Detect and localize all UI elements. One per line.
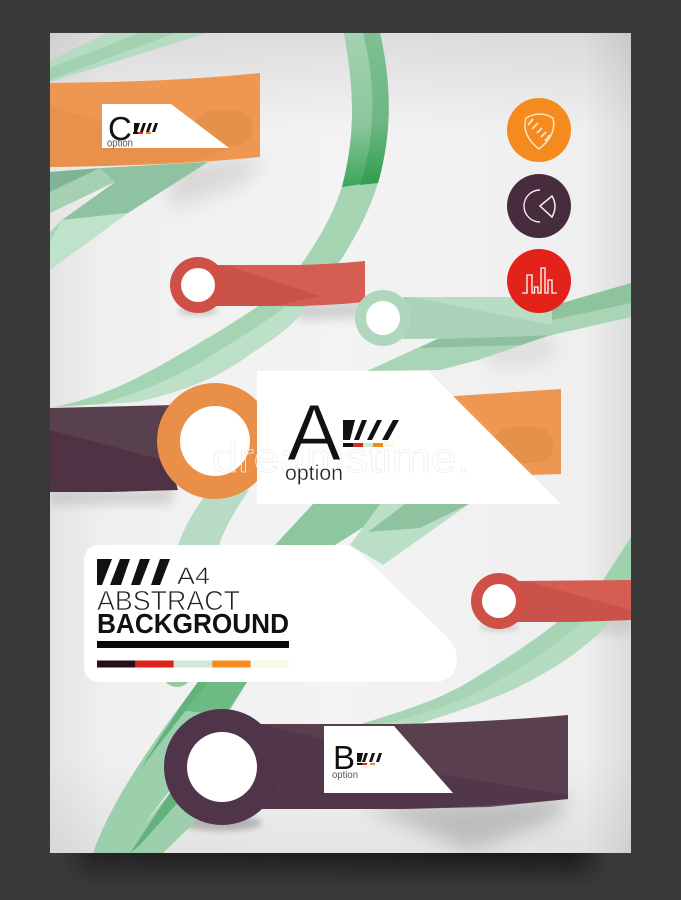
tab: option B [164, 709, 568, 825]
white label box [102, 104, 229, 148]
purple band [222, 715, 568, 809]
letter A: A [287, 388, 342, 477]
tab: red pin upper [170, 257, 365, 313]
ribbon: bottom strand [93, 682, 247, 853]
soft cast shadows [50, 155, 631, 850]
icon: red bar chart [507, 249, 571, 313]
option word: option [107, 138, 133, 150]
colour bar [357, 763, 375, 765]
tab: option C orange label [50, 73, 260, 167]
title stripes [97, 559, 170, 585]
heading: background: BACKGROUND [97, 608, 289, 639]
ribbon: right long strand [367, 283, 631, 371]
purple ring [164, 709, 280, 825]
tab: light green pin [355, 290, 552, 346]
tab: red pin right [471, 573, 631, 629]
colour bar [97, 660, 289, 668]
icon: orange shield [507, 98, 571, 162]
colour bar [133, 132, 151, 134]
watermark: dreamstime. [212, 434, 470, 481]
ribbon: large arc [54, 33, 389, 407]
ribbon: left middle strands [50, 162, 208, 270]
orange ring [157, 383, 273, 499]
page drop shadow [72, 853, 600, 880]
stripes [357, 753, 382, 762]
stripes [134, 123, 158, 132]
heading: A4: A4 [177, 563, 210, 590]
black rule [97, 641, 289, 648]
small green pin tip under card [162, 657, 192, 687]
option word: option [332, 769, 358, 781]
panel: title card [84, 545, 457, 682]
option word: option [285, 462, 343, 485]
page sheet [50, 33, 631, 853]
orange right band [440, 389, 561, 476]
stripes [343, 420, 399, 440]
ribbon: right lower strand [358, 537, 631, 725]
white label box [324, 726, 453, 793]
tab: option A [50, 371, 561, 504]
ribbon: top-left strand [50, 33, 207, 82]
heading: abstract: ABSTRACT [97, 585, 240, 616]
colour bar [343, 443, 393, 447]
icon: purple pie [507, 174, 571, 238]
letter B: B [333, 739, 355, 776]
purple band [50, 405, 178, 492]
ribbon: strands below option A [178, 490, 469, 565]
white label box [257, 371, 561, 504]
letter C: C [108, 110, 132, 147]
green ribbons [50, 33, 631, 853]
